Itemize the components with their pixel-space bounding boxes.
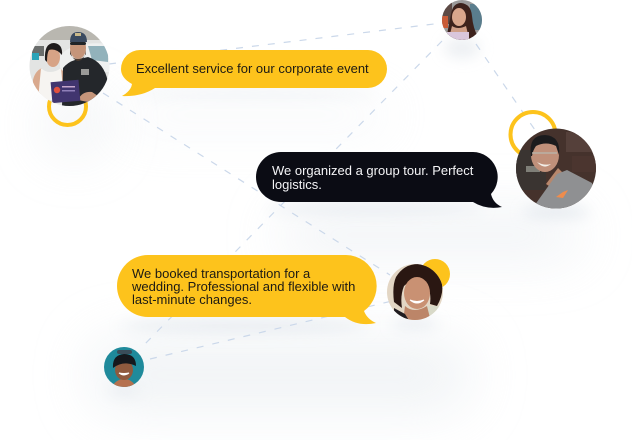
soft background shadows xyxy=(47,38,590,410)
avatar: couple holding certificate xyxy=(29,26,110,106)
avatar: woman with long hair xyxy=(442,0,482,40)
avatar: smiling woman with curly hair xyxy=(386,263,444,322)
speech bubble: group tour xyxy=(256,152,502,208)
testimonial text: group tour xyxy=(272,163,474,192)
testimonial text: wedding: wedding. Professional and flexible with xyxy=(132,279,355,294)
decorative rings and dot xyxy=(49,88,556,289)
testimonial text: corporate event: Excellent service for our corporate event xyxy=(136,61,369,76)
testimonial text: wedding: last-minute changes. xyxy=(132,292,252,307)
speech bubble: corporate event xyxy=(121,50,387,96)
testimonial text: group tour: We organized a group tour. Perfect xyxy=(272,163,473,178)
testimonial text: wedding: We booked transportation for a xyxy=(132,266,310,281)
speech bubble: wedding xyxy=(117,255,377,324)
dashed connection lines xyxy=(103,23,535,359)
avatar: woman with goggles by the pool xyxy=(104,347,144,387)
testimonial text: group tour: logistics. xyxy=(272,177,322,192)
testimonial text: wedding xyxy=(132,266,355,307)
avatar: man in grey t-shirt xyxy=(516,128,598,209)
